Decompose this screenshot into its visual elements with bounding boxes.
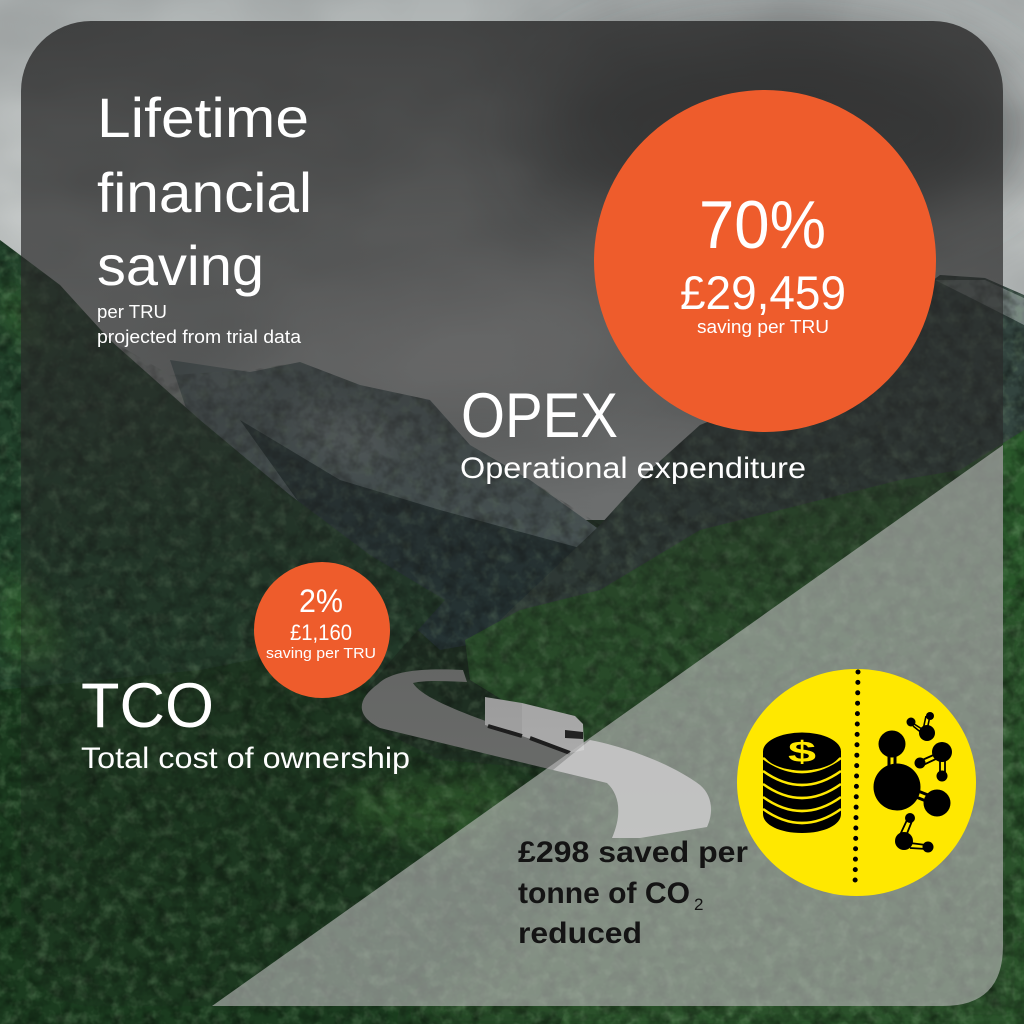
CO2 saving statement: £298 saved per [518, 836, 748, 869]
OPEX saving circle [594, 90, 936, 432]
OPEX label: OPEX [461, 381, 618, 451]
subtitle: projected from trial data [97, 327, 302, 347]
dotted divider [855, 672, 858, 890]
OPEX saving circle: 70% [699, 187, 826, 263]
CO2 saving statement: reduced [518, 917, 642, 950]
subtitle [97, 302, 302, 347]
right forest slope [465, 430, 1024, 1024]
left green mountain [0, 240, 445, 760]
light road seen through the overlay [553, 740, 711, 838]
CO2 saving statement: tonne of CO [518, 877, 690, 910]
TCO label [81, 671, 410, 775]
truck [485, 697, 584, 753]
snow on right peak [935, 280, 1024, 325]
title: financial [97, 161, 312, 224]
TCO saving circle: saving per TRU [266, 645, 376, 662]
OPEX saving circle: £29,459 [680, 266, 846, 319]
sky with clouds [0, 0, 1024, 620]
light triangular overlay [212, 445, 1003, 1006]
foliage texture [0, 240, 1024, 1024]
lower valley slope [240, 420, 610, 650]
bright green patches [0, 270, 540, 850]
TCO saving circle: £1,160 [290, 620, 352, 645]
TCO label: Total cost of ownership [81, 742, 410, 775]
lower left forest [0, 650, 620, 1024]
icon: molecules [874, 712, 952, 852]
CO2 saving statement: 2 [694, 895, 703, 914]
subtitle: per TRU [97, 302, 167, 322]
distant rocky mountain [170, 360, 610, 600]
right mountain [500, 275, 1024, 640]
OPEX label [460, 381, 806, 485]
title: Lifetime [97, 86, 309, 149]
title [97, 86, 312, 297]
TCO saving circle: 2% [299, 583, 343, 619]
OPEX saving circle: saving per TRU [697, 317, 829, 337]
snow and rock streaks [190, 365, 410, 470]
TCO saving circle [254, 562, 390, 698]
icon: coin stack: $ [788, 736, 817, 769]
valley floor base [0, 520, 1024, 1024]
CO2 saving statement [518, 836, 748, 950]
road [362, 669, 711, 838]
yellow icon circle [737, 669, 976, 896]
title: saving [97, 234, 264, 297]
lower right hillside [400, 600, 1024, 1024]
OPEX label: Operational expenditure [460, 452, 806, 485]
TCO label: TCO [81, 671, 214, 741]
icon: coin stack [763, 732, 841, 833]
